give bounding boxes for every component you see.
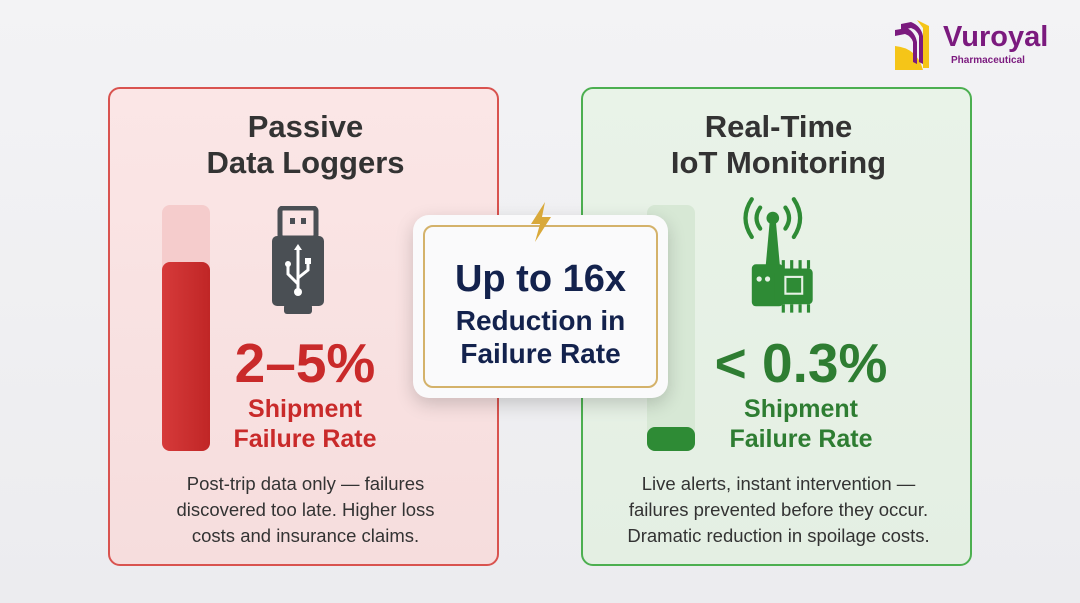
bar: failure level: [162, 205, 210, 451]
description: costs and insurance claims.: [192, 525, 419, 546]
description: discovered too late. Higher loss: [176, 499, 435, 520]
callout text: Up to 16x: [455, 258, 626, 300]
callout text: [455, 258, 626, 369]
callout: up to 16x reduction: [413, 215, 668, 398]
stat label: Failure Rate: [729, 425, 873, 453]
logo: [895, 20, 1048, 70]
description: Live alerts, instant intervention —: [642, 473, 915, 494]
icon: iot antenna chip: [743, 197, 813, 313]
panel: real-time iot monitoring: [581, 87, 972, 566]
callout text: Failure Rate: [460, 338, 621, 369]
heading: Passive: [248, 109, 363, 144]
description: [176, 473, 435, 546]
heading: Real-Time: [705, 109, 852, 144]
stat label: [729, 395, 873, 453]
description: [627, 473, 930, 546]
heading: Data Loggers: [206, 145, 405, 180]
stat label: Failure Rate: [233, 425, 377, 453]
stat label: Shipment: [744, 395, 858, 423]
stat: <0.3%: < 0.3%: [715, 332, 887, 394]
logo text: Vuroyal: [943, 21, 1048, 53]
heading: IoT Monitoring: [671, 145, 886, 180]
description: Dramatic reduction in spoilage costs.: [627, 525, 930, 546]
panel: passive data loggers: [108, 87, 499, 566]
description: Post-trip data only — failures: [187, 473, 424, 494]
stat: 2-5%: 2–5%: [235, 332, 375, 394]
icon: usb drive: [272, 206, 324, 314]
icon: lightning: [531, 202, 551, 242]
icon: logo mark: [895, 20, 929, 70]
stat label: Shipment: [248, 395, 362, 423]
logo: Pharmaceutical: [951, 55, 1025, 66]
bar: failure level: [647, 205, 695, 451]
callout text: Reduction in: [456, 305, 625, 336]
heading: [671, 109, 886, 180]
heading: [206, 109, 405, 180]
stat label: [233, 395, 377, 453]
description: failures prevented before they occur.: [629, 499, 928, 520]
